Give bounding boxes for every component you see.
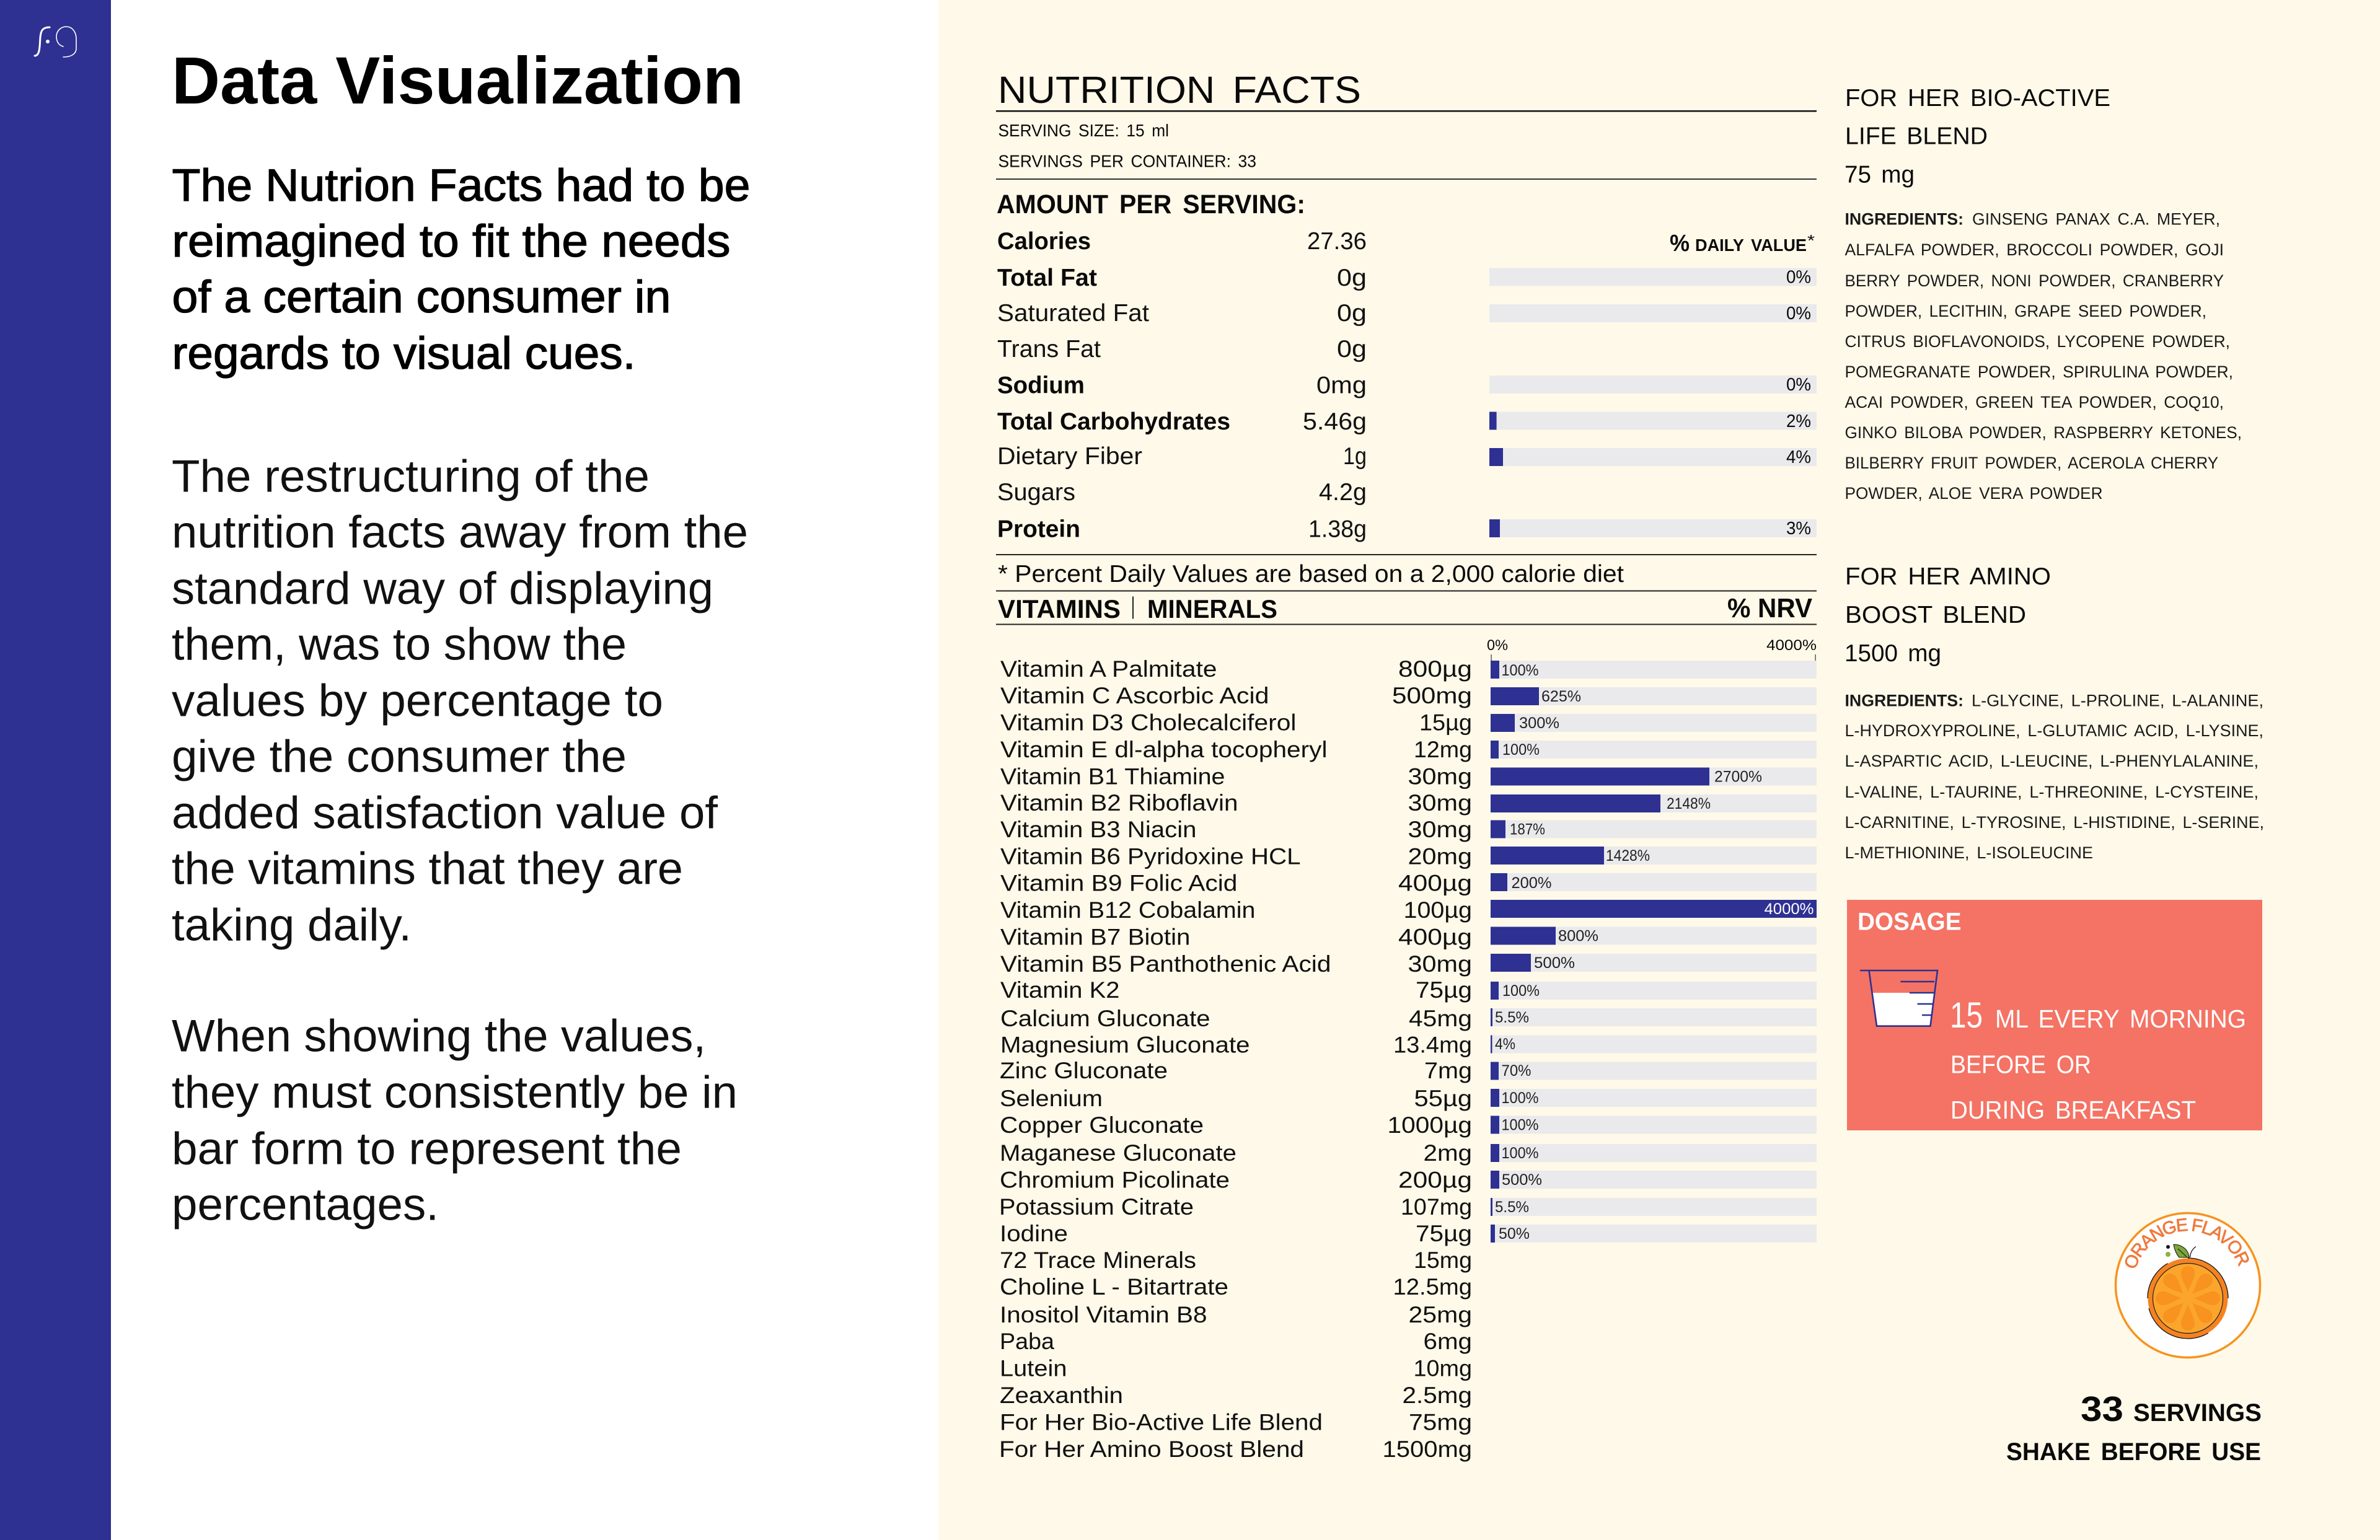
row: Vitamin B6 Pyridoxine HCL (1000, 843, 1817, 869)
label: percent daily value: * (1807, 231, 1815, 250)
text block: amino boost blend: L-CARNITINE, L-TYROSINE, L-HISTIDINE, L-SERINE, (1844, 813, 2264, 832)
row: Vitamin B6 Pyridoxine HCL: Vitamin B6 Pyridoxine HCL (1000, 843, 1300, 869)
callout: dosage (1847, 900, 2262, 1130)
row: Vitamin B5 Panthothenic Acid: 500% (1534, 954, 1575, 972)
row: Paba: Paba (1000, 1328, 1054, 1354)
row: Potassium Citrate: 5.5% (1495, 1199, 1529, 1216)
text block: dosage instructions: DURING BREAKFAST (1950, 1096, 2196, 1124)
row: Vitamin B2 Riboflavin: Vitamin B2 Riboflavin (1000, 790, 1238, 816)
row: Vitamin A Palmitate (1000, 656, 1817, 682)
text block: bio-active life blend: POMEGRANATE POWDER, SPIRULINA POWDER, (1844, 363, 2233, 381)
heading: dosage: DOSAGE (1858, 909, 1961, 936)
row: For Her Bio-Active Life Blend: 75mg (1409, 1409, 1472, 1435)
row: Maganese Gluconate: Maganese Gluconate (1000, 1140, 1236, 1166)
row: total fat (997, 265, 1817, 291)
text block: amino boost blend: L-HYDROXYPROLINE, L-GLUTAMIC ACID, L-LYSINE, (1844, 721, 2263, 740)
row: saturated fat: Saturated Fat (997, 300, 1149, 327)
row: Vitamin B6 Pyridoxine HCL: 20mg (1408, 843, 1472, 869)
row: Magnesium Gluconate: 4% (1495, 1036, 1515, 1053)
text block: bar form paragraph: bar form to represent the (172, 1124, 682, 1174)
row: Copper Gluconate (1000, 1112, 1817, 1138)
heading: percent NRV: % NRV (1727, 593, 1813, 623)
icon: orange flavor badge: ORANGE FLAVOR (2125, 1218, 2249, 1268)
text block: bio-active life blend: POWDER, ALOE VERA POWDER (1844, 484, 2102, 503)
row: protein: 3% (1786, 519, 1811, 539)
text block: lead paragraph: The Nutrion Facts had to be (172, 161, 750, 211)
row: Potassium Citrate (999, 1194, 1817, 1220)
row: Selenium: 55µg (1414, 1085, 1472, 1111)
row: total carbohydrates: 5.46g (1303, 408, 1367, 435)
row: Lutein: 10mg (1413, 1355, 1472, 1381)
row: Calcium Gluconate: 5.5% (1495, 1009, 1529, 1026)
row: Vitamin A Palmitate: 800µg (1398, 656, 1472, 682)
row: Vitamin B12 Cobalamin: Vitamin B12 Cobalamin (1000, 897, 1256, 923)
text block: amino boost blend: L-METHIONINE, L-ISOLEUCINE (1844, 843, 2093, 862)
text block: bio-active life blend: POWDER, LECITHIN, GRAPE SEED POWDER, (1844, 302, 2206, 320)
row: Vitamin B1 Thiamine: Vitamin B1 Thiamine (1000, 763, 1225, 790)
text block: servings (2081, 1389, 2262, 1429)
text block: restructuring paragraph: added satisfaction value of (172, 788, 718, 838)
text block: amino boost blend (1844, 563, 2264, 862)
row: Vitamin E dl-alpha tocopheryl: Vitamin E dl-alpha tocopheryl (1000, 736, 1328, 762)
row: Vitamin K2 (1000, 977, 1817, 1003)
row: Vitamin E dl-alpha tocopheryl (1000, 736, 1817, 762)
row: Vitamin B1 Thiamine (1000, 763, 1817, 790)
row: dietary fiber: 1g (1343, 443, 1367, 470)
row: dietary fiber (997, 443, 1817, 470)
row: Lutein: Lutein (1000, 1355, 1067, 1381)
text block: dosage instructions: 15 (1950, 995, 1983, 1036)
row: Chromium Picolinate: Chromium Picolinate (1000, 1166, 1230, 1192)
row: Copper Gluconate: Copper Gluconate (1000, 1112, 1204, 1138)
row: Maganese Gluconate: 2mg (1423, 1140, 1472, 1166)
row: Vitamin D3 Cholecalciferol: 300% (1519, 715, 1559, 732)
row: total fat: 0g (1337, 265, 1367, 291)
row: Chromium Picolinate: 500% (1502, 1171, 1542, 1189)
heading: vitamins and minerals: MINERALS (1147, 594, 1277, 623)
row: Calcium Gluconate (1000, 1005, 1817, 1031)
icon: measuring cup (1860, 970, 1937, 1026)
row: For Her Bio-Active Life Blend: For Her Bio-Active Life Blend (1000, 1409, 1323, 1435)
row: Vitamin B12 Cobalamin (1000, 897, 1817, 923)
text block: dosage instructions: ML EVERY MORNING (1995, 1005, 2246, 1033)
text block: servings: SERVINGS (2133, 1399, 2262, 1427)
panel: description (172, 43, 750, 1230)
row: Vitamin B6 Pyridoxine HCL: 1428% (1606, 847, 1650, 865)
row: dietary fiber: 4% (1786, 447, 1811, 467)
row: 72 Trace Minerals (1000, 1247, 1472, 1273)
row: Vitamin B5 Panthothenic Acid (1000, 951, 1817, 977)
row: Zeaxanthin: 2.5mg (1402, 1382, 1472, 1408)
row: calories (997, 228, 1367, 255)
row: Vitamin A Palmitate: 100% (1501, 662, 1538, 679)
row: Zinc Gluconate (1000, 1057, 1817, 1083)
label: percent daily value (1670, 231, 1815, 257)
row: For Her Amino Boost Blend (999, 1436, 1472, 1462)
row: saturated fat: 0g (1337, 300, 1367, 327)
text block: bio-active life blend: FOR HER BIO-ACTIVE (1845, 85, 2110, 112)
row: Vitamin B2 Riboflavin (1000, 790, 1817, 816)
footnote: percent daily values: * Percent Daily Values are based on a 2,000 calorie diet (998, 561, 1624, 587)
text block: bio-active life blend: ACAI POWDER, GREEN TEA POWDER, COQ10, (1844, 393, 2224, 411)
row: Vitamin D3 Cholecalciferol: Vitamin D3 Cholecalciferol (1000, 709, 1297, 735)
row: Iodine: 75µg (1416, 1220, 1472, 1246)
row: Vitamin B9 Folic Acid (1000, 870, 1817, 896)
row: Inositol Vitamin B8: 25mg (1408, 1301, 1472, 1327)
text block: dosage instructions (1950, 995, 2246, 1124)
row: sodium: 0% (1786, 375, 1811, 395)
row: Lutein (1000, 1355, 1472, 1381)
row: sugars: 4.2g (1319, 479, 1367, 506)
row: total fat: 0% (1786, 268, 1811, 288)
row: Vitamin E dl-alpha tocopheryl: 100% (1502, 741, 1540, 759)
row: Magnesium Gluconate (1000, 1031, 1817, 1057)
text block: amino boost blend: FOR HER AMINO (1845, 563, 2051, 590)
label: percent daily value: % (1670, 231, 1690, 257)
heading: amount per serving: AMOUNT PER SERVING: (997, 190, 1305, 219)
text block: bar form paragraph: they must consistently be in (172, 1067, 738, 1118)
text block: bio-active life blend: ALFALFA POWDER, BROCCOLI POWDER, GOJI (1844, 240, 2224, 259)
text block: restructuring paragraph: give the consumer the (172, 731, 627, 782)
row: Iodine: Iodine (1000, 1220, 1068, 1246)
row: sodium: Sodium (997, 372, 1085, 399)
text block: bio-active life blend: LIFE BLEND (1845, 123, 1988, 150)
row: Calcium Gluconate: 45mg (1409, 1005, 1472, 1031)
icon: f9 logo (35, 27, 76, 57)
row: Zeaxanthin (1000, 1382, 1472, 1408)
row: Vitamin C Ascorbic Acid: Vitamin C Ascorbic Acid (1000, 682, 1269, 708)
row: Vitamin K2: 100% (1502, 982, 1540, 1000)
row: Paba: 6mg (1423, 1328, 1472, 1354)
row: For Her Amino Boost Blend: 1500mg (1382, 1436, 1472, 1462)
row: Vitamin B5 Panthothenic Acid: 30mg (1408, 951, 1472, 977)
row: Vitamin B5 Panthothenic Acid: Vitamin B5 Panthothenic Acid (1000, 951, 1331, 977)
text block: dosage instructions: BEFORE OR (1950, 1050, 2091, 1078)
text block: bio-active life blend: INGREDIENTS: (1844, 209, 1963, 228)
row: calories: Calories (997, 228, 1091, 255)
chart: NRV scale (1487, 637, 1817, 679)
row: Vitamin B7 Biotin: Vitamin B7 Biotin (1000, 923, 1190, 949)
text block: bio-active life blend (1844, 85, 2242, 503)
row: dietary fiber: Dietary Fiber (997, 443, 1142, 470)
text block: serving size: SERVING SIZE: 15 ml (998, 121, 1169, 140)
row: Vitamin C Ascorbic Acid: 500mg (1392, 682, 1472, 708)
text block: restructuring paragraph (172, 451, 748, 951)
row: total fat: Total Fat (997, 265, 1097, 291)
text block: amino boost blend: L-VALINE, L-TAURINE, L-THREONINE, L-CYSTEINE, (1844, 783, 2259, 801)
text block: restructuring paragraph: nutrition facts away from the (172, 507, 748, 558)
row: Zinc Gluconate: 70% (1501, 1062, 1531, 1080)
row: Vitamin B12 Cobalamin: 4000% (1764, 900, 1814, 918)
text block: lead paragraph (172, 161, 750, 379)
text block: bar form paragraph (172, 1011, 738, 1230)
text block: amino boost blend: 1500 mg (1844, 640, 1941, 667)
text block: bio-active life blend: BILBERRY FRUIT POWDER, ACEROLA CHERRY (1844, 454, 2218, 472)
text block: restructuring paragraph: The restructuring of the (172, 451, 650, 502)
row: For Her Amino Boost Blend: For Her Amino Boost Blend (999, 1436, 1304, 1462)
text block: amino boost blend: INGREDIENTS: (1844, 692, 1963, 710)
row: Choline L - Bitartrate: Choline L - Bitartrate (1000, 1274, 1228, 1300)
text block: restructuring paragraph: the vitamins that they are (172, 844, 683, 894)
title: Data Visualization (172, 43, 744, 118)
text block: servings per container: SERVINGS PER CONTAINER: 33 (998, 151, 1256, 171)
row: Magnesium Gluconate: 13.4mg (1393, 1031, 1472, 1057)
row: Chromium Picolinate (1000, 1166, 1817, 1192)
row: sugars: Sugars (997, 479, 1075, 506)
row: Copper Gluconate: 1000µg (1387, 1112, 1472, 1138)
icon: orange flavor badge (2115, 1212, 2261, 1358)
text block: bio-active life blend: BERRY POWDER, NONI POWDER, CRANBERRY (1844, 271, 2224, 290)
row: Vitamin B12 Cobalamin: 100µg (1403, 897, 1472, 923)
row: trans fat: 0g (1337, 336, 1367, 363)
text block: amino boost blend: L-GLYCINE, L-PROLINE, L-ALANINE, (1972, 692, 2263, 710)
text block: amino boost blend: L-ASPARTIC ACID, L-LEUCINE, L-PHENYLALANINE, (1844, 752, 2259, 770)
heading: vitamins and minerals (998, 594, 1277, 623)
chart: NRV scale: 0% (1487, 637, 1508, 654)
row: Vitamin D3 Cholecalciferol (1000, 709, 1817, 735)
row: Vitamin B9 Folic Acid: Vitamin B9 Folic Acid (1000, 870, 1237, 896)
text block: restructuring paragraph: standard way of displaying (172, 564, 713, 614)
heading: vitamins and minerals: VITAMINS (998, 594, 1121, 623)
row: Choline L - Bitartrate (1000, 1274, 1472, 1300)
row: Vitamin K2: Vitamin K2 (1000, 977, 1119, 1003)
row: Zinc Gluconate: 7mg (1424, 1057, 1472, 1083)
row: Vitamin B1 Thiamine: 2700% (1714, 768, 1762, 786)
row: Chromium Picolinate: 200µg (1398, 1166, 1472, 1192)
row: Paba (1000, 1328, 1472, 1354)
row: Vitamin C Ascorbic Acid (1000, 682, 1817, 708)
row: Potassium Citrate: 107mg (1401, 1194, 1472, 1220)
row: Vitamin E dl-alpha tocopheryl: 12mg (1414, 736, 1472, 762)
row: saturated fat: 0% (1786, 304, 1811, 323)
row: calories: 27.36 (1307, 228, 1367, 255)
text block: restructuring paragraph: values by percentage to (172, 675, 663, 726)
row: sodium (997, 372, 1817, 399)
row: Vitamin K2: 75µg (1416, 977, 1472, 1003)
row: Inositol Vitamin B8: Inositol Vitamin B8 (1000, 1301, 1207, 1327)
row: Vitamin B7 Biotin: 400µg (1398, 923, 1472, 949)
row: Zinc Gluconate: Zinc Gluconate (1000, 1057, 1168, 1083)
text block: restructuring paragraph: them, was to show the (172, 620, 627, 669)
row: Vitamin B3 Niacin: 30mg (1408, 816, 1472, 842)
text block: lead paragraph: regards to visual cues. (172, 328, 636, 379)
text block: shake before use: SHAKE BEFORE USE (2006, 1438, 2261, 1466)
text block: bar form paragraph: When showing the values, (172, 1011, 706, 1061)
panel: blends and dosage (1844, 85, 2264, 1466)
row: total carbohydrates: Total Carbohydrates (997, 408, 1230, 435)
row: Vitamin C Ascorbic Acid: 625% (1541, 688, 1581, 705)
row: Vitamin B9 Folic Acid: 400µg (1398, 870, 1472, 896)
row: protein: Protein (997, 516, 1080, 543)
text block: amino boost blend: BOOST BLEND (1845, 602, 2026, 628)
row: Vitamin B7 Biotin (1000, 923, 1817, 949)
row: Vitamin B3 Niacin: 187% (1510, 821, 1545, 838)
row: Vitamin B1 Thiamine: 30mg (1408, 763, 1472, 790)
row: Maganese Gluconate: 100% (1501, 1145, 1538, 1162)
text block: lead paragraph: reimagined to fit the needs (172, 216, 730, 266)
row: Choline L - Bitartrate: 12.5mg (1393, 1274, 1472, 1300)
label: percent daily value: DAILY VALUE (1695, 235, 1807, 255)
row: Vitamin B2 Riboflavin: 30mg (1408, 790, 1472, 816)
row: trans fat (997, 336, 1367, 363)
row: Selenium: 100% (1501, 1089, 1538, 1107)
row: 72 Trace Minerals: 72 Trace Minerals (1000, 1247, 1196, 1273)
chart: NRV scale: 4000% (1766, 637, 1817, 654)
text block: servings: 33 (2081, 1389, 2123, 1429)
row: For Her Bio-Active Life Blend (1000, 1409, 1472, 1435)
panel: nutrition facts (996, 69, 1817, 1462)
text block: bar form paragraph: percentages. (172, 1180, 439, 1230)
row: protein (997, 516, 1817, 543)
row: Zeaxanthin: Zeaxanthin (1000, 1382, 1123, 1408)
row: Magnesium Gluconate: Magnesium Gluconate (1000, 1031, 1250, 1057)
row: Inositol Vitamin B8 (1000, 1301, 1472, 1327)
row: Copper Gluconate: 100% (1501, 1117, 1538, 1134)
text block: restructuring paragraph: taking daily. (172, 900, 412, 951)
row: Vitamin B9 Folic Acid: 200% (1511, 874, 1552, 892)
row: Calcium Gluconate: Calcium Gluconate (1000, 1005, 1210, 1031)
heading: nutrition facts: NUTRITION FACTS (998, 69, 1361, 111)
row: sugars (997, 479, 1367, 506)
row: Maganese Gluconate (1000, 1140, 1817, 1166)
text block: bio-active life blend: GINSENG PANAX C.A. MEYER, (1972, 209, 2220, 228)
row: Selenium: Selenium (1000, 1085, 1103, 1111)
row: Vitamin B7 Biotin: 800% (1558, 927, 1598, 944)
row: Vitamin B3 Niacin: Vitamin B3 Niacin (1000, 816, 1196, 842)
row: protein: 1.38g (1308, 516, 1367, 543)
row: Potassium Citrate: Potassium Citrate (999, 1194, 1194, 1220)
row: saturated fat (997, 300, 1817, 327)
text block: bio-active life blend: CITRUS BIOFLAVONOIDS, LYCOPENE POWDER, (1844, 332, 2230, 351)
row: Vitamin B3 Niacin (1000, 816, 1817, 842)
row: Selenium (1000, 1085, 1817, 1111)
row: Vitamin D3 Cholecalciferol: 15µg (1419, 709, 1472, 735)
row: Iodine (1000, 1220, 1817, 1246)
row: trans fat: Trans Fat (997, 336, 1101, 363)
row: Vitamin A Palmitate: Vitamin A Palmitate (1000, 656, 1217, 682)
row: Vitamin B2 Riboflavin: 2148% (1667, 795, 1711, 812)
text block: lead paragraph: of a certain consumer in (172, 272, 671, 322)
row: total carbohydrates: 2% (1786, 411, 1811, 431)
text block: bio-active life blend: GINKO BILOBA POWDER, RASPBERRY KETONES, (1844, 423, 2242, 442)
panel: blue sidebar (0, 0, 111, 1540)
row: Iodine: 50% (1499, 1225, 1530, 1243)
text block: bio-active life blend: 75 mg (1844, 161, 1915, 188)
row: sodium: 0mg (1316, 372, 1367, 399)
row: total carbohydrates (997, 408, 1817, 435)
row: 72 Trace Minerals: 15mg (1414, 1247, 1472, 1273)
